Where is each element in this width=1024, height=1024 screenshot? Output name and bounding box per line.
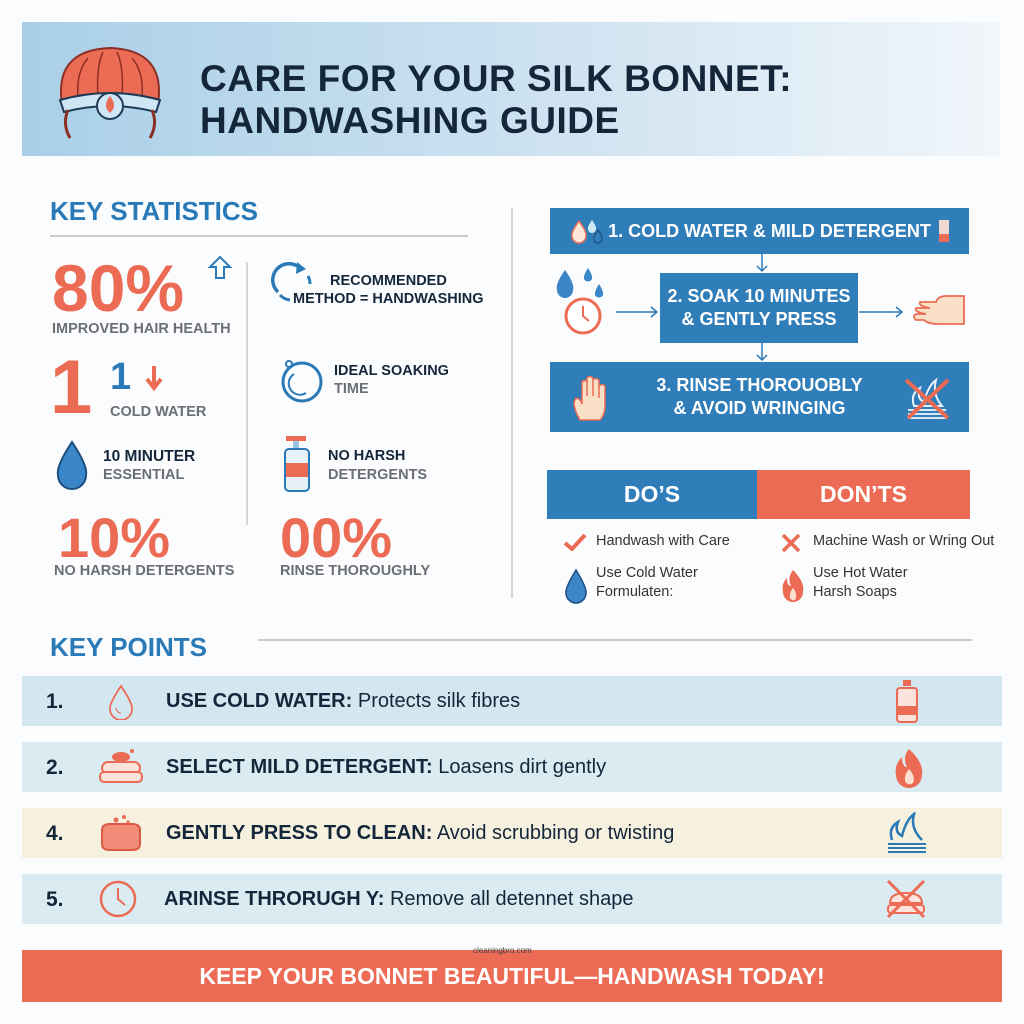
do's / don'ts header: DO’S: [624, 481, 680, 507]
do: cold water: [565, 565, 698, 604]
icon: no wringing: [904, 378, 950, 420]
heading: key points: KEY POINTS: [50, 632, 207, 662]
stat: ideal soaking time: IDEAL SOAKING: [334, 363, 449, 379]
arrow: step2 to step3: [756, 343, 768, 361]
heading: key statistics: KEY STATISTICS: [50, 196, 258, 226]
stat: 10 minuter: [56, 440, 195, 490]
stat: 80%: [52, 251, 232, 337]
step 1 box: 1. COLD WATER & MILD DETERGENT: [608, 220, 931, 240]
stat: cold water: 1: [50, 345, 92, 430]
icon: pressing hand: [913, 295, 965, 325]
don't: hot water: Harsh Soaps: [813, 584, 897, 600]
stat: recommended method: RECOMMENDED: [330, 273, 447, 289]
key point 5: 5.: [46, 888, 64, 911]
don't: hot water: Use Hot Water: [813, 565, 908, 581]
stat: cold water: [50, 345, 206, 430]
key point 2: SELECT MILD DETERGENT: Loasens dirt gently: [166, 756, 606, 778]
stat: no harsh detergents: [284, 436, 427, 492]
key point 5: [22, 874, 1002, 924]
stat: 80%: 80%: [52, 251, 184, 325]
key point 1: [22, 676, 1002, 726]
do's / don'ts header: [547, 470, 970, 519]
key point 1: 1.: [46, 690, 64, 713]
arrow: out of step 2: [859, 306, 904, 318]
stat: recommended method: [270, 262, 484, 307]
key point 2: 2.: [46, 756, 64, 779]
stat: no harsh detergents: NO HARSH: [328, 448, 405, 464]
step 3 box: [550, 362, 969, 432]
don't: machine wash: Machine Wash or Wring Out: [813, 533, 994, 549]
stat: ideal soaking time: [282, 360, 449, 402]
step 3 box: 3. RINSE THOROUOBLY: [656, 375, 863, 395]
stat: ideal soaking time: TIME: [334, 381, 369, 397]
do: cold water: Formulaten:: [596, 584, 673, 600]
key point 1: USE COLD WATER: Protects silk fibres: [166, 690, 520, 712]
stat: cold water: COLD WATER: [110, 404, 206, 420]
icon: water drop: [56, 440, 88, 490]
step 2 box: [660, 273, 858, 343]
stat: no harsh detergents: DETERGENTS: [328, 467, 427, 483]
key point 5: ARINSE THRORUGH Y: Remove all detennet shape: [164, 888, 633, 910]
icon: drops and clock: [556, 268, 604, 334]
do: handwash: Handwash with Care: [596, 533, 730, 549]
icon: drops: [571, 220, 603, 244]
icon: up arrow: [208, 256, 232, 279]
title: [200, 58, 792, 141]
stat: 10%: NO HARSH DETERGENTS: [54, 563, 234, 579]
step 2 box: 2. SOAK 10 MINUTES: [667, 286, 851, 306]
icon: silk bonnet: [58, 47, 162, 139]
stat: 10%: [54, 506, 234, 579]
header banner: [22, 22, 1000, 156]
step 1 box: [550, 208, 969, 254]
watermark: cleaningbro.com: [473, 946, 532, 955]
footer banner: KEEP YOUR BONNET BEAUTIFUL—HANDWASH TODAY!: [199, 962, 825, 988]
title: HANDWASHING GUIDE: [200, 100, 620, 141]
stat: 10 minuter: ESSENTIAL: [103, 467, 184, 483]
step 3 box: & AVOID WRINGING: [674, 398, 846, 418]
key point 4: 4.: [46, 822, 64, 845]
stat: 00%: 00%: [280, 506, 392, 569]
arrow: into step 2: [616, 306, 658, 318]
arrow: step1 to step2: [756, 254, 768, 272]
stat: cold water: 1: [110, 356, 131, 398]
stat: 00%: RINSE THOROUGHLY: [280, 563, 430, 579]
icon: hand: [573, 376, 606, 421]
stat: 10%: 10%: [58, 506, 170, 569]
stat: 80%: IMPROVED HAIR HEALTH: [52, 321, 231, 337]
stat: recommended method: METHOD = HANDWASHING: [293, 291, 484, 307]
stat: 00%: [280, 506, 430, 579]
key point 4: [22, 808, 1002, 858]
don't: machine wash: [782, 533, 994, 552]
key point 2: [22, 742, 1002, 792]
key point 4: GENTLY PRESS TO CLEAN: Avoid scrubbing or twisting: [166, 822, 674, 844]
do: cold water: Use Cold Water: [596, 565, 698, 581]
do's / don'ts header: DON’TS: [820, 481, 907, 507]
title: CARE FOR YOUR SILK BONNET:: [200, 58, 792, 99]
footer banner: [22, 950, 1002, 1002]
stat: 10 minuter: 10 MINUTER: [103, 448, 195, 465]
step 2 box: & GENTLY PRESS: [681, 309, 837, 329]
don't: hot water: [782, 565, 908, 602]
